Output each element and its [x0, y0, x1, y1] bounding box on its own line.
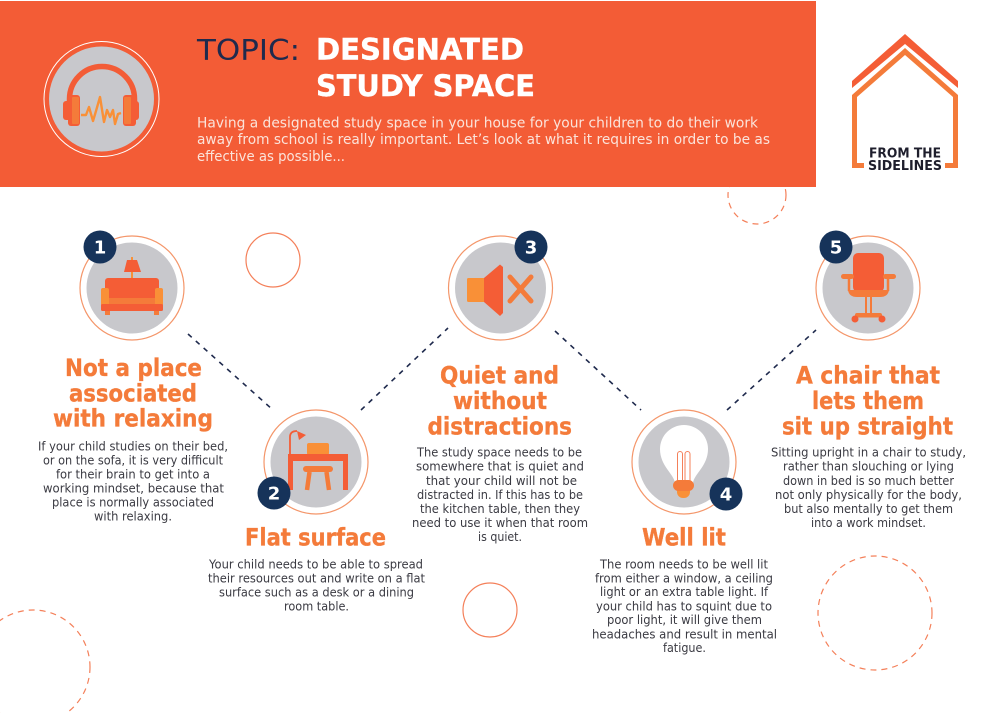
text block: step 3: need to use it when that room	[412, 516, 588, 530]
text block: step 1: place is normally associated	[52, 496, 214, 510]
text block: step 3: is quiet.	[478, 530, 522, 544]
text block: step 2	[208, 557, 425, 613]
badge: number 1: 1	[94, 238, 106, 258]
text block: step 5: rather than slouching or lying	[783, 460, 954, 474]
text block: step 3: distracted in. If this has to be	[417, 488, 583, 502]
panel: step 2	[208, 410, 425, 613]
text block: step 4: The room needs to be well lit	[599, 557, 768, 571]
text block: step 1: If your child studies on their bed,	[38, 440, 228, 454]
logo: From the Sidelines: SIDELINES	[868, 159, 942, 174]
text block: step 5: Sitting upright in a chair to study,	[771, 446, 966, 460]
badge: number 5	[820, 230, 852, 264]
text block: step 5: into a work mindset.	[811, 516, 926, 530]
text block: step 3: the kitchen table, then they	[420, 502, 580, 516]
text block: step 2: Your child needs to be able to spread	[208, 557, 423, 571]
heading: step 1: associated	[69, 380, 197, 408]
panel: header banner	[0, 1, 816, 187]
heading: step 3: Quiet and	[440, 362, 559, 390]
text block: step 1: for their brain to get into a	[56, 468, 210, 482]
text block: step 5: down in bed is so much better	[783, 474, 954, 488]
text block: step 1: working mindset, because that	[43, 482, 224, 496]
badge: number 2	[258, 476, 290, 510]
text block: step 3: somewhere that is quiet and	[416, 460, 584, 474]
text block: step 4: your child has to squint due to	[596, 599, 772, 613]
badge: number 5: 5	[830, 238, 842, 258]
heading: step 1: with relaxing	[53, 405, 213, 433]
heading: topic label: TOPIC:	[196, 34, 300, 67]
text block: step 3: that your child will not be	[426, 474, 577, 488]
text block: step 4	[592, 557, 777, 655]
text block: step 4: light or an extra table light. If	[600, 585, 769, 599]
text block: step 4: poor light, it will give them	[607, 613, 762, 627]
text block: step 4: fatigue.	[663, 641, 706, 655]
text block: step 5	[771, 446, 966, 530]
badge: number 2: 2	[268, 484, 280, 504]
heading: step 5: sit up straight	[782, 412, 953, 440]
panel: step 5	[771, 230, 966, 530]
text block: introduction: Having a designated study space in your house for your children to do their work	[197, 116, 759, 132]
text block: step 5: not only physically for the body,	[775, 488, 962, 502]
heading: title: DESIGNATED	[316, 32, 524, 66]
text block: step 2: room table.	[284, 599, 349, 613]
icon: headphones	[44, 42, 159, 156]
text block: introduction: effective as possible...	[197, 149, 345, 165]
panel: step 3	[412, 230, 588, 544]
panel: step 1	[38, 230, 228, 524]
heading: step 5	[782, 362, 953, 440]
icon: muted speaker	[448, 236, 552, 340]
text block: step 1: with relaxing.	[94, 510, 172, 524]
icon: desk, chair and lamp	[264, 410, 368, 514]
badge: number 3	[514, 230, 548, 264]
heading: step 2: Flat surface	[245, 524, 386, 552]
logo: From the Sidelines	[852, 34, 958, 174]
text block: step 5: but also mentally to get them	[784, 502, 953, 516]
badge: number 1	[84, 230, 116, 264]
heading: title: STUDY SPACE	[316, 69, 535, 103]
badge: number 3: 3	[525, 238, 537, 258]
badge: number 4: 4	[720, 484, 732, 506]
heading: step 4: Well lit	[642, 524, 726, 552]
heading: title	[316, 32, 535, 103]
text block: step 4: from either a window, a ceiling	[595, 571, 773, 585]
icon: sofa and lamp	[80, 236, 184, 340]
heading: step 3	[428, 362, 572, 440]
heading: step 3: distractions	[428, 412, 572, 440]
text block: step 2: surface such as a desk or a dining	[219, 585, 414, 599]
heading: step 1: Not a place	[65, 354, 202, 382]
text block: step 2: their resources out and write on a flat	[208, 571, 425, 585]
heading: step 1	[53, 354, 213, 433]
icon: office chair	[816, 236, 920, 340]
icon: light bulb	[632, 410, 736, 514]
text block: introduction	[197, 116, 770, 165]
heading: step 3: without	[453, 387, 547, 415]
heading: step 5: lets them	[812, 387, 924, 415]
heading: step 5: A chair that	[796, 362, 940, 390]
text block: step 1: or on the sofa, it is very difficult	[43, 454, 223, 468]
text block: step 4: headaches and result in mental	[592, 627, 777, 641]
logo: From the Sidelines: FROM THE	[869, 146, 941, 162]
text block: step 3: The study space needs to be	[416, 446, 582, 460]
text block: introduction: away from school is really important. Let’s look at what it requires in order to be as	[197, 132, 770, 148]
badge: number 4	[710, 478, 742, 510]
panel: step 4	[592, 410, 777, 655]
text block: step 1	[38, 440, 228, 524]
text block: step 3	[412, 446, 588, 544]
